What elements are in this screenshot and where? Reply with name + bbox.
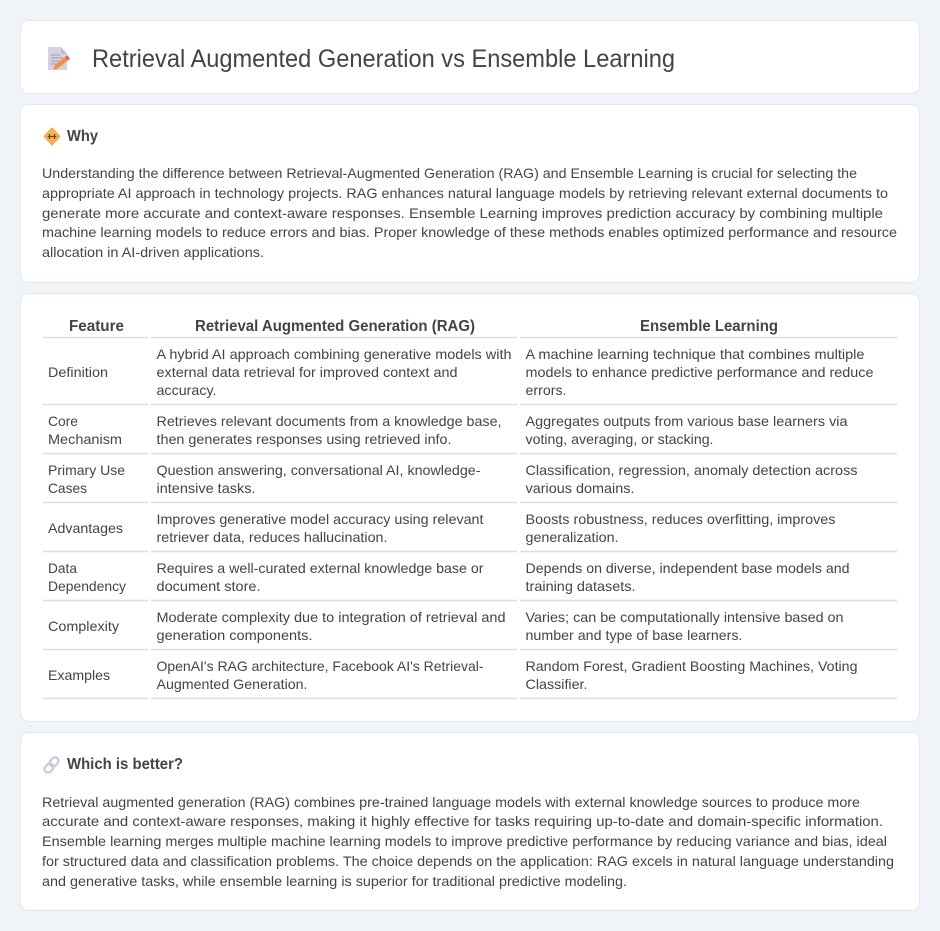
row: primary use cases xyxy=(43,462,897,502)
text block: which is better: for structured data and classification problems. The choice depends on the application: RAG excels in natural language understanding xyxy=(42,853,894,869)
row: advantages xyxy=(43,511,897,552)
row: data dependency: Requires a well-curated external knowledge base or xyxy=(156,560,484,576)
title: Retrieval Augmented Generation vs Ensemble Learning xyxy=(92,45,675,73)
row: data dependency xyxy=(43,560,897,600)
row: primary use cases: Primary Use xyxy=(48,462,125,478)
row: core mechanism: Retrieves relevant documents from a knowledge base, xyxy=(156,413,502,429)
text block: why: machine learning models to reduce errors and bias. Proper knowledge of these methods enables optimized performance and resource xyxy=(42,224,897,240)
icon: chain link xyxy=(43,756,60,774)
text block: which is better: and generative tasks, while ensemble learning is superior for traditional predictive modeling. xyxy=(42,873,627,889)
row: advantages: Advantages xyxy=(48,520,123,536)
row: examples: Examples xyxy=(48,667,110,683)
row: definition: models to enhance predictive performance and reduce xyxy=(526,364,874,380)
text block: why: appropriate AI approach in technology projects. RAG enhances natural language models by retrieving relevant external documents to xyxy=(42,185,888,201)
row: data dependency: Depends on diverse, independent base models and xyxy=(526,560,850,576)
table header row: Retrieval Augmented Generation (RAG) xyxy=(195,318,475,335)
row: core mechanism: then generates responses using retrieved info. xyxy=(156,431,452,447)
row: primary use cases: intensive tasks. xyxy=(156,480,256,496)
row: advantages: Boosts robustness, reduces overfitting, improves xyxy=(526,511,836,527)
icon: orange diamond xyxy=(44,128,60,145)
text block: which is better: accurate and context-aware responses, making it highly effective for tasks requiring up-to-date and domain-specific information. xyxy=(42,813,883,829)
row: definition: errors. xyxy=(526,382,566,398)
row: advantages: retriever data, reduces hallucination. xyxy=(156,529,388,545)
row: examples: OpenAI's RAG architecture, Facebook AI's Retrieval- xyxy=(156,658,484,674)
row: data dependency: training datasets. xyxy=(526,578,636,594)
panel: why xyxy=(20,104,920,282)
row: core mechanism: Mechanism xyxy=(48,431,122,447)
row: complexity: Moderate complexity due to integration of retrieval and xyxy=(156,609,506,625)
panel: comparison table xyxy=(20,294,920,722)
row: definition: Definition xyxy=(48,364,108,380)
heading: which is better: Which is better? xyxy=(67,756,183,773)
row: data dependency: Dependency xyxy=(48,578,126,594)
text block: which is better xyxy=(42,794,894,889)
row: complexity: number and type of base learners. xyxy=(526,627,742,643)
row: complexity: Complexity xyxy=(48,618,119,634)
row: core mechanism: voting, averaging, or stacking. xyxy=(526,431,714,447)
text block: why: generate more accurate and context-aware responses. Ensemble Learning improves prediction accuracy by combining multiple xyxy=(42,205,883,221)
heading: why: Why xyxy=(67,128,98,145)
row: core mechanism: Aggregates outputs from various base learners via xyxy=(526,413,848,429)
row: definition xyxy=(43,346,897,404)
text block: why: allocation in AI-driven applications. xyxy=(42,244,264,260)
row: definition: accuracy. xyxy=(156,382,216,398)
row: primary use cases: Cases xyxy=(48,480,87,496)
row: examples: Augmented Generation. xyxy=(156,676,308,692)
panel: which is better xyxy=(20,732,920,910)
panel: header xyxy=(20,20,920,94)
row: core mechanism xyxy=(43,413,897,454)
icon: memo with pencil xyxy=(48,47,70,70)
row: examples xyxy=(43,658,897,698)
row: core mechanism: Core xyxy=(48,413,78,429)
row: complexity xyxy=(43,609,897,650)
row: examples: Random Forest, Gradient Boosting Machines, Voting xyxy=(526,658,858,674)
row: advantages: generalization. xyxy=(526,529,618,545)
text block: which is better: Retrieval augmented generation (RAG) combines pre-trained language models with external knowledge sources to produce more xyxy=(42,794,860,810)
row: examples: Classifier. xyxy=(526,676,588,692)
row: data dependency: Data xyxy=(48,560,77,576)
text block: why xyxy=(42,165,897,260)
row: data dependency: document store. xyxy=(156,578,260,594)
row: definition: external data retrieval for improved context and xyxy=(156,364,458,380)
row: definition: A machine learning technique that combines multiple xyxy=(526,346,865,362)
table header row: Feature xyxy=(69,318,124,335)
table header row: Ensemble Learning xyxy=(640,318,778,335)
text block: why: Understanding the difference between Retrieval-Augmented Generation (RAG) and Ensemble Learning is crucial for selecting the xyxy=(42,165,857,181)
text block: which is better: Ensemble learning merges multiple machine learning models to improve predictive performance by reducing variance and bias, ideal xyxy=(42,833,887,849)
row: complexity: generation components. xyxy=(156,627,312,643)
row: definition: A hybrid AI approach combining generative models with xyxy=(156,346,512,362)
row: complexity: Varies; can be computationally intensive based on xyxy=(526,609,844,625)
row: primary use cases: Question answering, conversational AI, knowledge- xyxy=(156,462,481,478)
table header row xyxy=(43,318,897,338)
row: primary use cases: various domains. xyxy=(526,480,634,496)
row: primary use cases: Classification, regression, anomaly detection across xyxy=(526,462,858,478)
row: advantages: Improves generative model accuracy using relevant xyxy=(156,511,484,527)
